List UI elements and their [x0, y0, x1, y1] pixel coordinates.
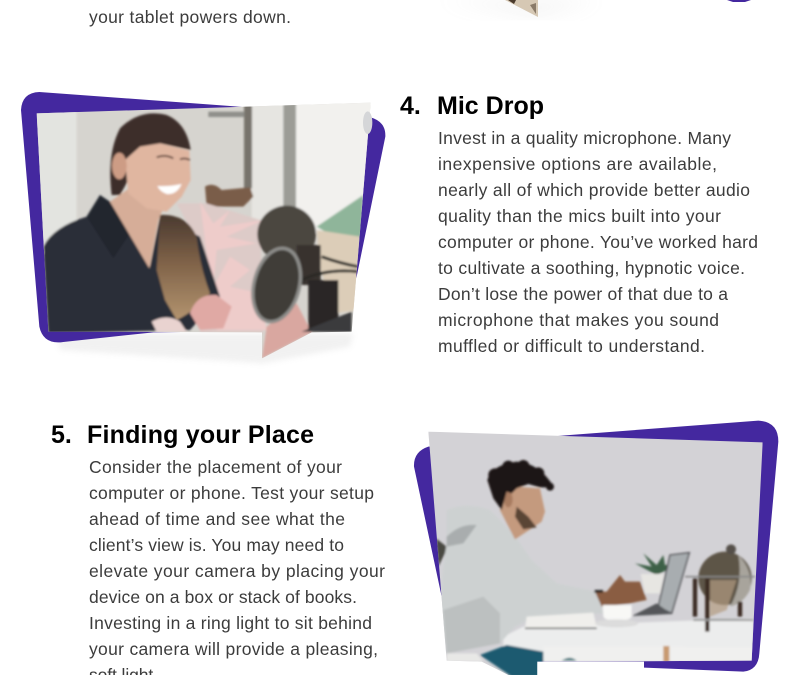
jeans	[480, 645, 543, 675]
white base block	[537, 662, 644, 675]
text block: Mic Drop body: Invest in a quality microphone. Many	[438, 128, 731, 148]
text block: Mic Drop body: inexpensive options are available,	[438, 154, 717, 174]
plant and pot	[635, 554, 668, 576]
hair	[110, 113, 191, 195]
text block: Finding your Place body: device on a box or stack of books.	[89, 587, 357, 607]
globe	[698, 552, 752, 605]
pop filter	[250, 245, 304, 324]
panel: step 4 Mic Drop	[21, 92, 758, 363]
panel: step 5 Finding your Place	[51, 421, 778, 675]
neck and face	[500, 487, 545, 539]
curly hair	[487, 460, 554, 510]
text block: Finding your Place body: ahead of time and see what the	[89, 509, 345, 529]
laptop	[658, 553, 689, 613]
shirt	[43, 195, 220, 333]
chair back	[436, 538, 447, 567]
hands	[190, 295, 232, 330]
text block: Finding your Place body: elevate your camera by placing your	[89, 561, 385, 581]
photo shadow	[57, 333, 353, 363]
text block: Mic Drop body: Don’t lose the power of that due to a	[438, 284, 728, 304]
heading: Finding your Place: 5.	[51, 421, 72, 449]
heading: Mic Drop: 4.	[400, 92, 421, 120]
text block: Mic Drop body: to cultivate a soothing, hypnotic voice.	[438, 258, 745, 278]
text block: Mic Drop body: muffled or difficult to understand.	[438, 336, 705, 356]
text block: Mic Drop body: computer or phone. You’ve worked hard	[438, 232, 758, 252]
photo: man working at laptop	[414, 421, 778, 675]
text block: Finding your Place body: Consider the placement of your	[89, 457, 342, 477]
photo scene	[33, 100, 373, 360]
text block: Mic Drop body	[438, 128, 758, 356]
notebook	[525, 613, 597, 628]
arm and hand	[595, 575, 647, 607]
hoodie	[441, 546, 602, 639]
text block: Finding your Place body	[89, 457, 385, 675]
mic body	[257, 206, 316, 262]
text block: Mic Drop body: microphone that makes you sound	[438, 310, 719, 330]
photo fragment: step 3	[440, 0, 751, 17]
text block: Finding your Place body: Investing in a ring light to sit behind	[89, 613, 372, 633]
text block: Mic Drop body: quality than the mics built into your	[438, 206, 721, 226]
long hair	[157, 215, 210, 320]
text block: Mic Drop body: nearly all of which provide better audio	[438, 180, 750, 200]
pink plant	[177, 203, 263, 333]
neck and face	[110, 187, 163, 268]
text block: Finding your Place body: client’s view is. You may need to	[89, 535, 344, 555]
table	[502, 618, 754, 654]
photo corner highlight	[363, 111, 372, 134]
text: step 3 last line: your tablet powers down.	[89, 7, 291, 27]
photo: woman speaking into microphone	[21, 92, 385, 363]
purple backing shape	[21, 92, 385, 342]
cup	[603, 605, 632, 621]
text block: Finding your Place body: computer or phone. Test your setup	[89, 483, 374, 503]
panel: step 3 remainder	[89, 0, 751, 27]
photo scene	[427, 430, 767, 675]
text block: Finding your Place body: your camera will provide a pleasing,	[89, 639, 378, 659]
heading: Mic Drop: Mic Drop	[437, 92, 544, 120]
background greenery	[317, 195, 363, 240]
heading: Finding your Place: Finding your Place	[87, 421, 314, 449]
purple backing shape	[414, 421, 778, 672]
